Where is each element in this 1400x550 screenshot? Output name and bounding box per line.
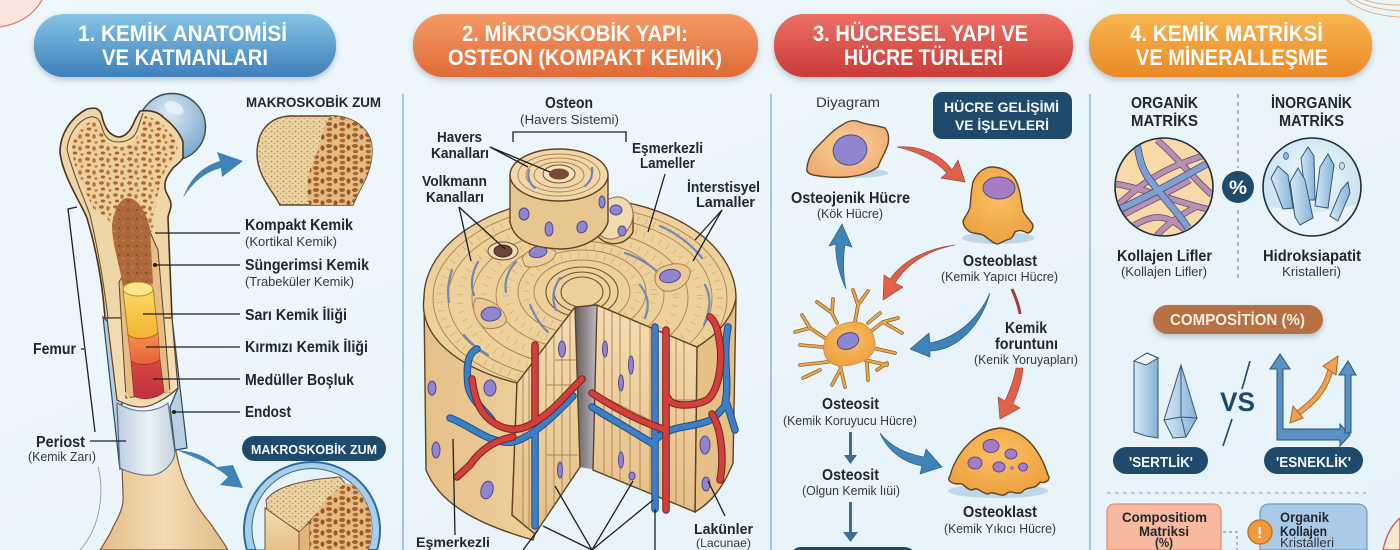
header 4 bbox=[1089, 14, 1372, 77]
femur illustration bbox=[60, 94, 228, 550]
cell: osteocyte bbox=[795, 290, 902, 387]
icon: flexibility axes bbox=[1270, 354, 1356, 446]
label: bone remodeling: Kemik bbox=[1005, 320, 1047, 337]
arrow: osteogenic to osteoblast bbox=[897, 147, 965, 182]
label: osteogenic: Osteojenik Hücre bbox=[791, 190, 910, 207]
icon: hard crystals bbox=[1134, 353, 1197, 438]
labels and leader lines: Osteon bbox=[545, 95, 593, 112]
box: cell development: VE İŞLEVLERİ bbox=[955, 117, 1049, 133]
label: osteogenic bbox=[791, 190, 910, 221]
labels and leader lines: Volkmann bbox=[422, 173, 487, 190]
box: composition matrix: Compositiom bbox=[1122, 509, 1207, 525]
pill: macroscopic zoom: MAKROSKOBİK ZUM bbox=[251, 442, 377, 457]
label: mature osteocyte: Osteosit bbox=[822, 467, 880, 484]
vertical dividers bbox=[403, 94, 1090, 550]
labels and leader lines: Femur bbox=[33, 341, 76, 358]
arrow: down two bbox=[843, 502, 858, 542]
captions: collagen and crystals: Kollajen Lifler bbox=[1117, 248, 1212, 265]
labels and leader lines: Süngerimsi Kemik bbox=[245, 257, 369, 274]
captions: collagen and crystals: Kristalleri) bbox=[1282, 265, 1341, 279]
labels and leader lines: (Kemik Zarı) bbox=[28, 450, 96, 464]
matrix headings: İNORGANİK bbox=[1271, 94, 1352, 112]
label: bone remodeling: foruntunı bbox=[995, 336, 1058, 353]
right cut face bbox=[593, 300, 700, 515]
pill: macroscopic zoom bbox=[242, 436, 386, 461]
label: bone remodeling: (Kenik Yoruyapları) bbox=[974, 353, 1078, 367]
left cut face bbox=[512, 307, 580, 534]
labels and leader lines: Endost bbox=[245, 404, 292, 421]
box: organic collagen: Organik bbox=[1280, 509, 1329, 525]
header 2 bbox=[413, 14, 758, 77]
bottom inset: bone cross-section circle bbox=[244, 462, 385, 550]
panel 4: matrix bbox=[1089, 14, 1372, 550]
labels and leader lines: (Kortikal Kemik) bbox=[245, 235, 337, 249]
header 2: 2. MİKROSKOBİK YAPI: bbox=[462, 21, 688, 46]
label: mature osteocyte bbox=[802, 467, 900, 498]
arrow: osteocyte to osteoclast bbox=[880, 433, 942, 474]
label: osteocyte: Osteosit bbox=[822, 396, 880, 413]
matrix headings: MATRİKS bbox=[1279, 112, 1344, 130]
labels and leader lines: Kanalları bbox=[431, 145, 489, 162]
labels and leader lines bbox=[28, 207, 369, 550]
arrow: to top inset bbox=[183, 152, 243, 198]
arrow: osteoblast to osteocyte blue bbox=[910, 293, 990, 357]
labels and leader lines: Eşmerkezli bbox=[632, 140, 703, 157]
pill: hardness: 'SERTLİK' bbox=[1129, 454, 1193, 471]
label: osteogenic: (Kök Hücre) bbox=[817, 207, 883, 221]
pill: composition: COMPOSİTİON (%) bbox=[1170, 311, 1305, 329]
side osteon bbox=[587, 190, 641, 246]
header 1: VE KATMANLARI bbox=[102, 45, 268, 70]
pill: flexibility: 'ESNEKLİK' bbox=[1276, 454, 1351, 471]
cell: osteoclast bbox=[948, 428, 1049, 498]
box: composition matrix: (%) bbox=[1155, 535, 1173, 550]
panel 2: osteon bbox=[413, 14, 760, 550]
pill: hardness bbox=[1113, 447, 1208, 474]
label: mature osteocyte: (Olgun Kemik lıüi) bbox=[802, 484, 900, 498]
box: composition matrix bbox=[1107, 504, 1221, 550]
arrow: dark red segment bbox=[1012, 289, 1020, 314]
box: organic collagen: Kristalleri bbox=[1280, 536, 1334, 550]
arrow: to bottom inset bbox=[177, 450, 243, 488]
labels and leader lines: Kanalları bbox=[426, 189, 484, 206]
labels and leader lines: Kırmızı Kemik İliği bbox=[245, 338, 368, 356]
icon: warning badge bbox=[1248, 520, 1272, 544]
matrix headings: ORGANİK bbox=[1131, 94, 1198, 112]
right outer wall bbox=[695, 298, 736, 512]
header 4: VE MİNERALLEŞME bbox=[1136, 45, 1328, 70]
header 3: HÜCRE TÜRLERİ bbox=[844, 45, 1003, 70]
label: osteoblast: Osteoblast bbox=[963, 253, 1038, 270]
labels and leader lines: Sarı Kemik İliği bbox=[245, 306, 347, 324]
arrow: osteocyte to osteogenic bbox=[829, 224, 852, 289]
box: composition matrix: Matriksi bbox=[1139, 523, 1189, 539]
box: cell development bbox=[933, 92, 1072, 139]
label: osteocyte bbox=[783, 396, 917, 428]
blood vessels bbox=[450, 317, 735, 526]
vs: VS bbox=[1220, 387, 1255, 417]
box: organic collagen: Kollajen bbox=[1280, 523, 1327, 539]
labels and leader lines: Medüller Boşluk bbox=[245, 372, 354, 389]
captions: collagen and crystals: (Kollajen Lifler) bbox=[1121, 265, 1207, 279]
labels and leader lines bbox=[416, 95, 760, 550]
label: osteoblast bbox=[941, 253, 1058, 284]
labels and leader lines: Periost bbox=[36, 434, 86, 451]
matrix headings bbox=[1131, 94, 1352, 130]
arrow: down one bbox=[844, 432, 857, 464]
pill: flexibility bbox=[1264, 447, 1363, 474]
labels and leader lines: Havers bbox=[437, 129, 482, 146]
top inset: macroscopic zoom: MAKROSKOBİK ZUM bbox=[246, 94, 381, 110]
left outer wall bbox=[424, 298, 535, 540]
label: osteoclast bbox=[944, 504, 1056, 536]
top inset: macroscopic zoom bbox=[246, 94, 381, 208]
corner decoration: top left bbox=[0, 0, 42, 27]
bone cylinder illustration bbox=[423, 149, 736, 540]
box: cell development: HÜCRE GELİŞİMİ bbox=[944, 99, 1059, 115]
header 1: 1. KEMİK ANATOMİSİ bbox=[78, 21, 287, 46]
osteocytes on walls bbox=[428, 341, 710, 500]
circle: hydroxyapatite crystals bbox=[1263, 138, 1362, 240]
labels and leader lines: (Havers Sistemi) bbox=[520, 112, 619, 127]
pill: composition bbox=[1153, 305, 1323, 334]
label: osteoblast: (Kemik Yapıcı Hücre) bbox=[941, 270, 1058, 284]
labels and leader lines: Eşmerkezli bbox=[416, 534, 490, 550]
label: osteoclast: (Kemik Yıkıcı Hücre) bbox=[944, 522, 1056, 536]
cell: osteogenic bbox=[807, 121, 889, 178]
corner decoration: top right bbox=[1347, 0, 1400, 17]
diagram caption: Diyagram bbox=[816, 94, 880, 110]
header 3 bbox=[774, 14, 1073, 77]
label: bone remodeling bbox=[974, 320, 1078, 367]
top surface with lamellae bbox=[423, 198, 736, 390]
icon: warning badge: ! bbox=[1257, 525, 1262, 542]
header 1 bbox=[34, 14, 336, 77]
header 3: 3. HÜCRESEL YAPI VE bbox=[813, 21, 1028, 46]
arrow: osteoblast to osteocyte bbox=[883, 245, 955, 300]
labels and leader lines: Lamaller bbox=[696, 194, 755, 211]
canal bbox=[572, 284, 596, 470]
captions: collagen and crystals bbox=[1117, 248, 1362, 279]
labels and leader lines: (Lacunae) bbox=[696, 536, 751, 550]
box: organic collagen bbox=[1260, 504, 1367, 550]
header 2: OSTEON (KOMPAKT KEMİK) bbox=[448, 45, 722, 70]
panel 3: cells bbox=[774, 14, 1078, 550]
vs bbox=[1220, 361, 1255, 446]
label: osteocyte: (Kemik Koruyucu Hücre) bbox=[783, 414, 917, 428]
labels and leader lines: Kompakt Kemik bbox=[245, 217, 353, 234]
circle: collagen fibers bbox=[1115, 138, 1213, 238]
captions: collagen and crystals: Hidroksiapatit bbox=[1263, 248, 1362, 265]
label: osteoclast: Osteoklast bbox=[963, 504, 1038, 521]
labels and leader lines: Lameller bbox=[640, 155, 695, 172]
percent badge: % bbox=[1229, 178, 1247, 199]
header 4: 4. KEMİK MATRİKSİ bbox=[1130, 21, 1323, 46]
labels and leader lines: Lakünler bbox=[694, 521, 753, 538]
labels and leader lines: (Trabeküler Kemik) bbox=[245, 275, 354, 289]
percent badge bbox=[1222, 171, 1254, 203]
panel 1: bone anatomy bbox=[28, 14, 386, 550]
labels and leader lines: İnterstisyel bbox=[687, 179, 760, 196]
matrix headings: MATRİKS bbox=[1131, 112, 1198, 130]
upper osteon cylinder bbox=[510, 149, 608, 249]
cell: osteoblast bbox=[962, 167, 1034, 244]
corner decoration: bottom right bbox=[1383, 518, 1400, 550]
arrow: to osteoclast bbox=[998, 368, 1023, 419]
box: bottom dark bbox=[793, 547, 912, 550]
